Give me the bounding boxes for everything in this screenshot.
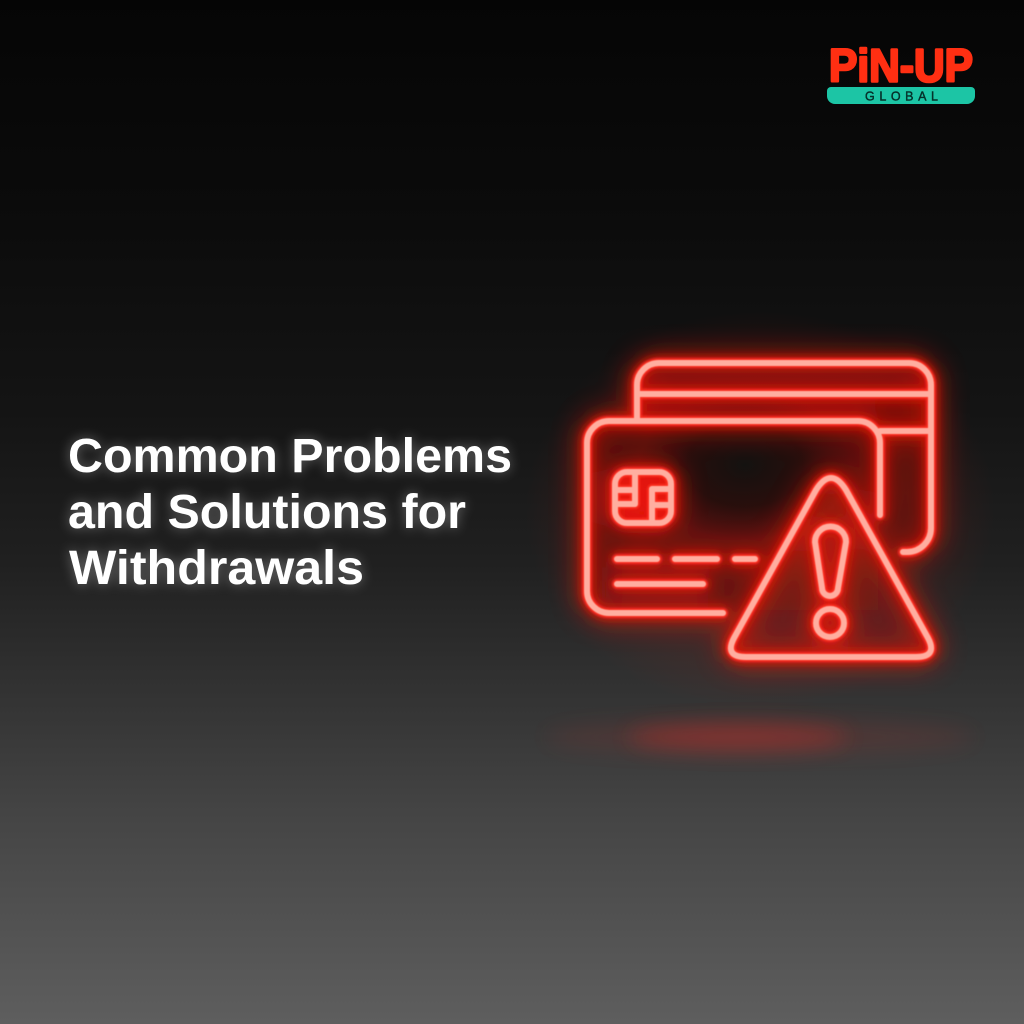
title glow: and Solutions for — [68, 486, 466, 539]
tube — [587, 363, 931, 657]
chip fill — [615, 472, 671, 523]
title text — [68, 430, 512, 595]
logo: Pin-Up Global — [827, 40, 975, 104]
logo subtitle: GLOBAL — [865, 90, 938, 104]
floor reflection — [545, 720, 975, 754]
title text: and Solutions for — [68, 486, 466, 539]
title text: Withdrawals — [69, 542, 364, 595]
title glow: Common Problems — [68, 430, 512, 483]
logo teal bar — [827, 87, 975, 104]
tube core — [587, 363, 931, 657]
logo wordmark: PiN-UP — [829, 40, 973, 92]
interior fills — [590, 372, 931, 657]
outer red haze — [525, 310, 995, 710]
title glow — [68, 430, 512, 595]
title — [68, 430, 512, 595]
icon: credit cards with warning triangle — [525, 310, 995, 710]
dark centre of card — [640, 390, 850, 540]
near glow — [587, 363, 931, 657]
title text: Common Problems — [68, 430, 512, 483]
title glow: Withdrawals — [69, 542, 364, 595]
wide glow — [587, 363, 931, 657]
